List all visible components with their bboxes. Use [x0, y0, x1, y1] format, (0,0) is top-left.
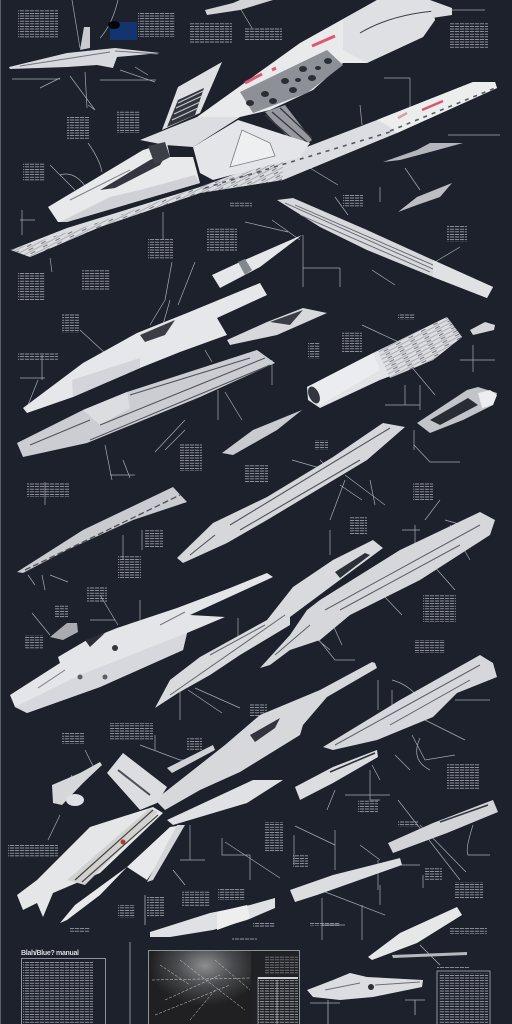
ship: white wedge [23, 283, 267, 413]
caption: left of wedge [18, 353, 58, 360]
component: sliver [392, 952, 467, 958]
component: cylinder [212, 235, 302, 288]
holed truss [240, 50, 343, 113]
table [258, 955, 298, 1024]
caption: bottom left [70, 928, 90, 933]
notes: above cylinder [207, 228, 237, 251]
notes: lower centre [293, 855, 308, 868]
caption: left edge lower [8, 845, 58, 857]
ship: ribbed hull [17, 350, 275, 457]
panel: star chart and table [148, 950, 300, 1024]
notes: centre under spiked ship [145, 530, 163, 547]
component: knob [470, 322, 495, 335]
component: big cylinder [306, 317, 462, 408]
notes: above twin arms [350, 517, 367, 534]
notes: under X wing three [218, 888, 245, 900]
caption: under hull [230, 202, 252, 207]
right wing [167, 780, 283, 825]
panel: manual text [22, 958, 106, 1024]
notes: above spiked ship [27, 482, 69, 497]
ship: long spiked [17, 487, 187, 573]
chart image [149, 951, 251, 1024]
ship: right small 2 [398, 183, 452, 212]
fin [147, 825, 185, 882]
ship: main cruiser [11, 0, 497, 257]
notes: under right long ship [447, 763, 479, 790]
ship part: wedge rear [227, 308, 327, 345]
caption: above detailed ship [315, 440, 328, 450]
notes: top right [450, 23, 488, 48]
ship: small dart [222, 410, 302, 455]
notes: left of gunship [55, 605, 68, 618]
notes: above X wing [110, 723, 153, 740]
lower long hull bar [11, 82, 497, 257]
notes: wing tip [118, 905, 135, 918]
ship: bottom compact [307, 973, 423, 1000]
component: open frame [417, 387, 497, 433]
spine with gun [155, 662, 377, 810]
ship: large X wing [17, 662, 377, 923]
caption: tube end [253, 922, 275, 927]
notes: below hull centre [148, 238, 173, 260]
notes: under ribbed hull [180, 443, 202, 471]
notes: far top left [18, 10, 58, 38]
component: flat hull [290, 858, 402, 902]
blue ink blot [108, 21, 137, 40]
notes: above wedge [62, 313, 79, 333]
caption: cylinder top [398, 313, 415, 320]
notes: under small top ship [245, 28, 282, 40]
nose section [48, 143, 200, 222]
notes: lower right [455, 882, 483, 899]
notes: left of nose [23, 162, 45, 182]
panel: specs text [437, 966, 490, 1024]
component: small left part [52, 762, 102, 806]
heading: manual panel: Blah/Blue? manual [21, 950, 79, 957]
component: small module [50, 623, 78, 640]
upper wing [197, 0, 435, 117]
caption: below flat hull [310, 922, 340, 926]
notes: right centre [413, 483, 433, 500]
truss under wing [265, 105, 312, 150]
ship: white gunship [10, 573, 273, 713]
notes: above right long ship [415, 640, 445, 653]
notes: second column row three [82, 270, 110, 290]
ship: long detailed [177, 423, 405, 563]
lower wing [60, 825, 183, 923]
ship: right small 1 [383, 143, 463, 162]
notes: under X wing one [147, 897, 164, 917]
notes: right of hull [343, 195, 363, 208]
notes: under twin arm tip [423, 595, 456, 622]
notes: beside blue blot [138, 12, 175, 37]
ship: long ribbed cruiser right [277, 198, 493, 298]
notes: left row three [18, 272, 45, 300]
caption: right of white tube [450, 927, 487, 934]
notes: above big cylinder [342, 332, 362, 352]
caption: under bottom tube [232, 937, 257, 940]
notes: under dart [245, 465, 268, 482]
notes: beside wedge rear [308, 342, 320, 359]
notes: above spine [250, 703, 267, 716]
caption: right lower ship [398, 820, 418, 827]
ship: twin arm lower [260, 512, 495, 668]
center triangle [193, 120, 310, 180]
main wing [17, 807, 163, 917]
fin with vents [162, 62, 222, 130]
centre strip [67, 808, 158, 885]
notes: lower spiked ship [118, 555, 141, 578]
ship: right long [323, 655, 497, 750]
notes: top centre [190, 22, 232, 44]
ship: top small [205, 0, 273, 15]
notes: under X wing two [182, 890, 210, 907]
notes: left of fin [117, 110, 140, 133]
upper left arm [107, 753, 167, 810]
notes: above small part [62, 732, 84, 744]
notes: above small bar [187, 738, 202, 750]
ship: right lower [388, 800, 498, 853]
notes: right of ribbed cruiser [447, 225, 467, 242]
ship: top left side view [9, 27, 160, 69]
notes: above nose [67, 117, 89, 140]
component: white tube right [368, 907, 462, 960]
notes: beside module [25, 635, 43, 650]
notes: under tube [358, 800, 378, 813]
notes: right of X wing [265, 822, 283, 852]
component: right tube [295, 750, 378, 800]
notes: above gunship [87, 587, 107, 602]
component: small bar [167, 745, 215, 773]
notes: lower right inner [425, 868, 442, 881]
ship: twin arm upper [155, 540, 383, 708]
component: bottom tube [150, 898, 275, 937]
